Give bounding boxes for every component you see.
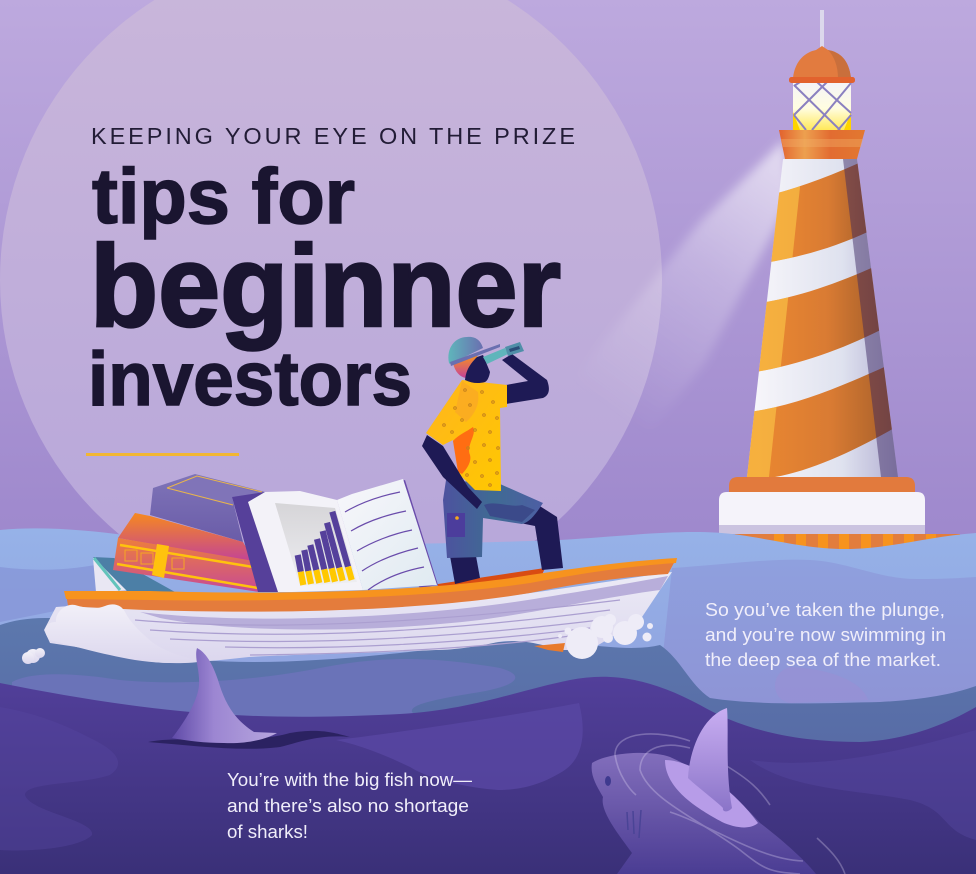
body copy: sharks: and there’s also no shortage [227, 795, 469, 816]
right page [337, 479, 437, 590]
books [93, 474, 438, 592]
orange gunwale [64, 558, 677, 600]
investor figure [422, 337, 563, 584]
shark body highlights [615, 734, 845, 874]
orange plinth [729, 477, 915, 492]
boat [22, 558, 677, 664]
sea: lilac wave behind right text [640, 560, 976, 874]
chart panel [275, 503, 357, 586]
front leg [515, 503, 563, 570]
sea: mid blue blob [12, 659, 640, 760]
body copy: sharks: of sharks! [227, 821, 308, 842]
red book [113, 513, 260, 592]
lowered arm [422, 435, 482, 509]
title line: investors: investors [88, 337, 412, 422]
left page [248, 491, 363, 592]
head and beard [465, 355, 490, 383]
body copy: plunge: the deep sea of the market. [705, 649, 941, 670]
gallery [779, 130, 865, 159]
dorsal patch [665, 760, 758, 827]
hull planks [135, 600, 620, 655]
right foam bubbles [558, 614, 653, 659]
shirt [426, 380, 507, 491]
sea: light blue top layer [0, 528, 976, 874]
lantern room [793, 82, 851, 130]
yellow title rule [86, 453, 239, 456]
keel hint [534, 643, 565, 652]
body copy: plunge [705, 599, 946, 670]
cap [448, 337, 500, 366]
left foam [22, 604, 205, 664]
shorts [443, 480, 543, 558]
body copy: plunge: So you’ve taken the plunge, [705, 599, 945, 620]
raised arm [502, 354, 549, 404]
spyglass [483, 342, 524, 364]
lighthouse light beam [500, 140, 790, 470]
dome [793, 46, 851, 78]
back leg [450, 556, 480, 584]
teal book [93, 557, 175, 592]
eyebrow heading: KEEPING YOUR EYE ON THE PRIZE [91, 123, 575, 149]
shark eye and gills [605, 776, 641, 838]
cover [232, 492, 280, 592]
sea: steel blue layer [0, 618, 976, 874]
striped waterline [735, 534, 960, 550]
large pale moon circle [0, 0, 662, 611]
body copy: sharks: You’re with the big fish now— [227, 769, 472, 790]
hull inner shadow [140, 576, 668, 630]
open book [232, 479, 438, 592]
bar chart [298, 512, 352, 585]
shark fin with shadow [148, 648, 350, 749]
white base [719, 492, 925, 534]
purple book [150, 474, 265, 542]
dorsal fin [688, 708, 732, 811]
background sky [0, 0, 976, 560]
tower with spiral stripes [747, 159, 898, 477]
body copy: plunge: and you’re now swimming in [705, 624, 946, 645]
deep sea lighter blobs [0, 703, 976, 850]
sea: deep purple layer [0, 677, 976, 874]
sea: wave shading on left [0, 562, 170, 622]
title block [88, 123, 575, 422]
body copy: sharks [227, 769, 472, 842]
lighthouse [719, 10, 960, 550]
brim [789, 77, 855, 83]
text lines on right page [345, 492, 424, 590]
antenna [820, 10, 824, 48]
face [453, 355, 478, 378]
title line: tips for: tips for [92, 152, 355, 240]
shark body [592, 753, 816, 874]
title line: beginner: beginner [90, 221, 561, 351]
orange strake [66, 561, 675, 612]
boat interior [436, 568, 545, 592]
sea: pale blob near right text bottom [775, 667, 868, 703]
hull [44, 572, 672, 663]
shark [592, 708, 845, 874]
